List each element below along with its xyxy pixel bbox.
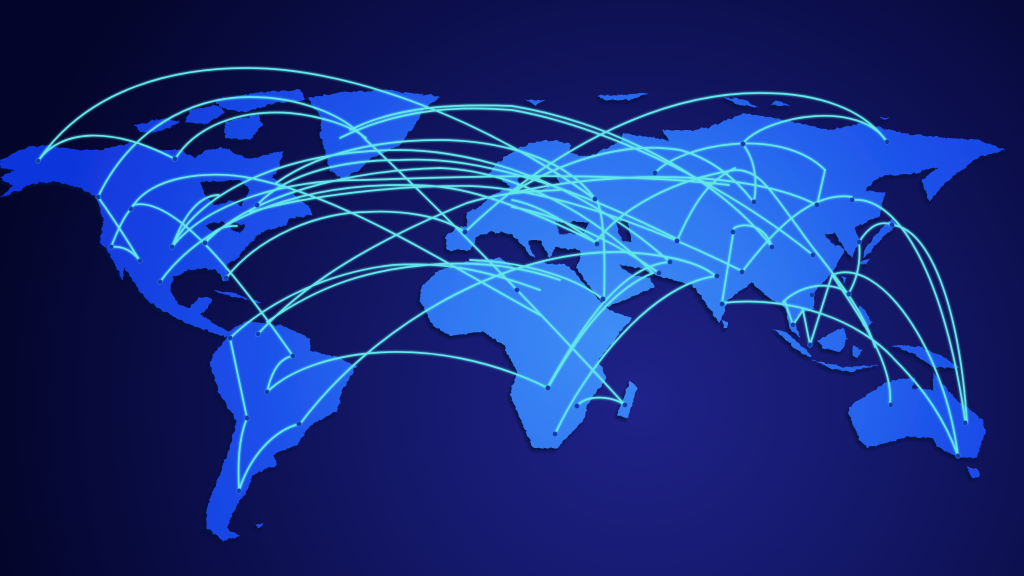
Java and Lesser Sunda — [812, 360, 880, 372]
arcs: North America — [38, 68, 813, 405]
Taiwan and Philippines — [842, 276, 872, 328]
arcs: Africa and Middle East — [470, 170, 800, 434]
arcs: Asia and Oceania — [465, 93, 967, 456]
arcs: South America — [230, 190, 717, 491]
North America — [0, 143, 312, 338]
Africa — [420, 258, 632, 448]
South Atlantic islands — [255, 523, 265, 529]
Australia — [848, 373, 985, 458]
connection arcs — [38, 68, 967, 491]
Arctic islands — [135, 90, 305, 140]
Caribbean islands — [213, 290, 262, 304]
Arctic Eurasian islands — [525, 93, 890, 120]
Borneo — [818, 327, 848, 352]
Sumatra — [773, 328, 812, 358]
Madagascar — [617, 380, 637, 418]
Tasmania — [967, 467, 980, 478]
Sri Lanka — [722, 320, 728, 328]
city nodes — [36, 140, 967, 493]
New Guinea — [890, 345, 960, 368]
Sulawesi — [852, 345, 862, 358]
Greenland — [307, 90, 440, 180]
Eurasia — [445, 113, 1005, 338]
world map — [0, 90, 1005, 541]
South America — [207, 321, 357, 541]
Japan — [860, 218, 896, 265]
